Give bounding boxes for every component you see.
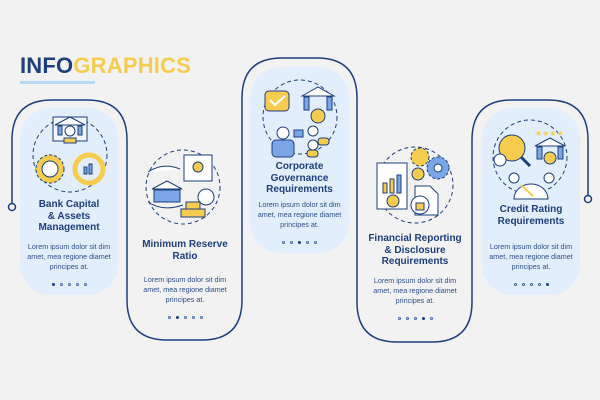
text 2: Lorem ipsum dolor sit dim amet, mea regione diamet principes at. bbox=[143, 275, 227, 304]
heading 5: Requirements bbox=[498, 216, 564, 226]
panel 1 text bbox=[27, 199, 111, 286]
icon: bank capital bbox=[33, 117, 107, 192]
dots 1 bbox=[52, 283, 87, 286]
heading 4 bbox=[368, 233, 462, 267]
panel 2 text bbox=[142, 239, 228, 319]
heading 2 bbox=[142, 239, 228, 262]
heading 3 bbox=[266, 161, 333, 195]
heading 4: Financial Reporting bbox=[368, 233, 462, 244]
right node bbox=[584, 196, 592, 202]
heading 4: Requirements bbox=[382, 256, 448, 267]
icon: credit rating: ★★★★ bbox=[535, 129, 564, 138]
heading 5: Credit Rating bbox=[500, 204, 562, 215]
title underline bbox=[20, 81, 95, 84]
heading 3: Governance bbox=[271, 172, 328, 184]
dots 5 bbox=[514, 283, 549, 286]
title: INFOGRAPHICS bbox=[20, 53, 191, 78]
text 1: Lorem ipsum dolor sit dim amet, mea regione diamet principes at. bbox=[27, 242, 111, 271]
panel 5 text bbox=[489, 204, 573, 286]
text 3: Lorem ipsum dolor sit dim amet, mea regione diamet principes at. bbox=[258, 200, 341, 229]
icon: credit rating bbox=[493, 120, 567, 199]
heading 1: Management bbox=[38, 222, 100, 233]
text 5: Lorem ipsum dolor sit dim amet, mea regione diamet principes at. bbox=[489, 242, 573, 271]
icon: corporate governance bbox=[263, 80, 337, 157]
heading 4: & Disclosure bbox=[384, 244, 446, 256]
text 4: Lorem ipsum dolor sit dim amet, mea regione diamet principes at. bbox=[373, 276, 457, 305]
heading 5 bbox=[498, 204, 564, 226]
heading 1: Bank Capital bbox=[39, 199, 99, 210]
left node bbox=[8, 204, 16, 210]
serpentine outline bbox=[12, 58, 588, 342]
heading 1 bbox=[38, 199, 100, 233]
icon: financial reporting bbox=[377, 147, 453, 223]
heading 3: Requirements bbox=[266, 184, 333, 195]
dots 4 bbox=[398, 317, 433, 320]
panel 3 text bbox=[258, 161, 342, 244]
dots 3 bbox=[282, 241, 317, 244]
icon: reserve ratio bbox=[146, 150, 220, 224]
heading 2: Minimum Reserve bbox=[142, 239, 228, 250]
heading 1: & Assets bbox=[48, 210, 90, 222]
dots 2 bbox=[168, 316, 203, 319]
panel 4 text bbox=[368, 233, 462, 320]
heading 2: Ratio bbox=[172, 250, 198, 262]
heading 3: Corporate bbox=[276, 161, 323, 172]
panel fills bbox=[20, 67, 580, 295]
